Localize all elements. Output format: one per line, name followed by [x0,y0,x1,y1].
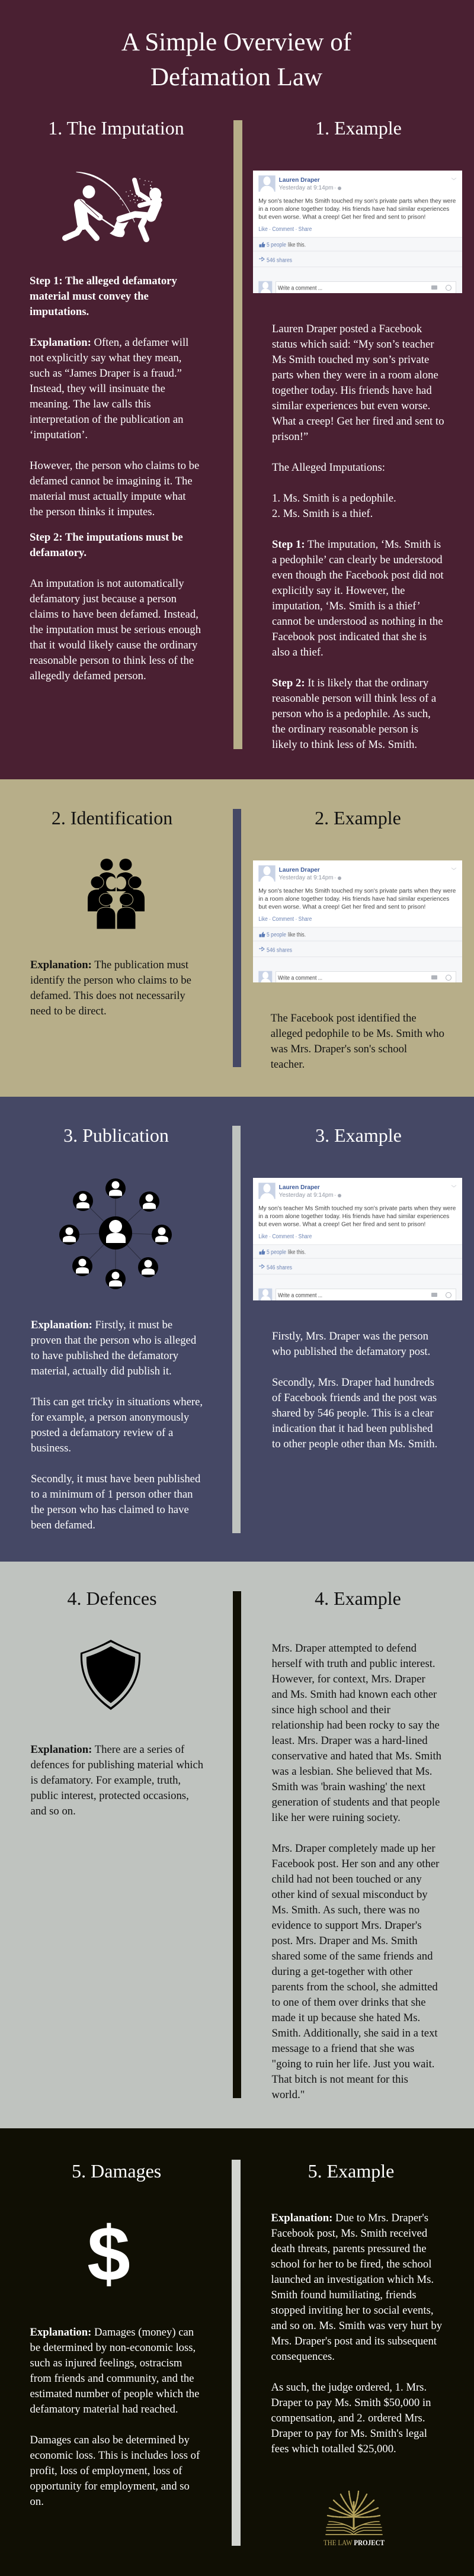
text: defences explanation: and so on. [31,1805,76,1817]
text: example 4: However, for context, Mrs. Draper [271,1673,425,1685]
text: example 1: 1. Ms. Smith is a pedophile. [272,492,396,505]
text: step 1 explanation: Explanation: Often, a defamer will [30,336,188,349]
text: example 1: Facebook post indicated that she is [272,631,427,643]
text: damages explanation: Damages can also be determined by [30,2434,190,2446]
text: example 4: made it up because she hated Ms. [271,2012,420,2024]
text: publication explanation: This can get tricky in situations where, [31,1396,203,1408]
text: example 5: Draper to pay for Ms. Smith's legal [271,2427,427,2440]
text: publication explanation [31,1319,203,1531]
text: step 1 explanation: interpretation of the publication an [30,413,183,426]
facebook post screenshot: in a room alone together today. His friends have had similar experiences [258,1213,449,1220]
facebook post screenshot: My son's teacher Ms Smith touched my son's private parts when they were [258,1205,456,1212]
text: step 1 explanation: However, the person who claims to be [30,460,199,472]
text: example 4: message to a friend that she was [271,2042,414,2055]
facebook post screenshot: · [334,1192,336,1199]
text: example 4: Facebook post. Her son and any other [271,1858,439,1870]
facebook post screenshot: but even worse. What a creep! Get her fired and sent to prison! [258,1221,425,1228]
text: example 4: Ms. Smith. As such, there was no [271,1904,419,1916]
facebook post screenshot: but even worse. What a creep! Get her fired and sent to prison! [258,904,425,910]
text: step 1 explanation: Step 1: The alleged defamatory [30,275,177,287]
text: publication explanation: to a minimum of 1 person other than [31,1488,193,1501]
text: example 4: "going to ruin her life. Just you wait. [271,2058,434,2070]
text: step 2 explanation: claims to have been defamed. Instead, [30,608,198,621]
text: identification explanation: Explanation: The publication must [30,959,188,971]
facebook post screenshot [253,860,462,982]
facebook post screenshot: Write a comment ... [278,1293,322,1299]
text: example 5: Draper to pay Ms. Smith $50,000 in [271,2397,431,2409]
text: example 5: consequences. [271,2350,335,2363]
text: example 4: during a get-together with other [271,1965,412,1978]
facebook post screenshot: Write a comment ... [278,975,322,982]
heading: example 2: 2. Example [315,807,401,828]
logo: the law project [324,2491,385,2547]
text: publication explanation: for example, a person anonymously [31,1411,189,1424]
facebook post screenshot: · [334,185,336,191]
text: example 1: a pedophile’ can clearly be understood [272,554,443,566]
text: example 1: explicitly say it. However, the [272,584,405,597]
text: step 2 explanation [30,531,201,682]
facebook post screenshot: 546 shares [267,1264,292,1271]
facebook post screenshot: Lauren Draper [279,1184,320,1191]
facebook post screenshot: but even worse. What a creep! Get her fired and sent to prison! [258,214,425,220]
text: step 2 explanation: allegedly defamed person. [30,670,146,682]
text: step 2 explanation: reasonable person to think less of the [30,654,194,667]
text: example 4: relationship had been rocky to say the [271,1719,440,1732]
text: example 1: The Alleged Imputations: [272,461,385,474]
facebook post screenshot [253,171,462,293]
panel: 3. publication [0,1097,474,1562]
text: step 1 explanation: ‘imputation’. [30,429,88,441]
text: step 1 explanation: imputations. [30,306,89,318]
text: example 2: was Mrs. Draper's son's school [271,1043,407,1055]
text: step 2 explanation: that it would likely cause the ordinary [30,639,197,651]
text: damages explanation: profit, loss of employment, loss of [30,2465,182,2477]
text: defences explanation [31,1743,203,1817]
text: damages explanation: be determined by non-economic loss, [30,2341,196,2354]
text: example 2: teacher. [271,1058,305,1071]
text: example 1: parts when they were in a room alone [272,369,438,381]
text: example 2 [270,1012,444,1071]
text: step 1 explanation: meaning. The law calls this [30,398,151,410]
text: example 1: together today. His friends have had [272,384,432,397]
text: example 3: Secondly, Mrs. Draper had hundreds [272,1376,434,1389]
text: example 5: compensation, and 2. ordered Mrs. [271,2412,425,2424]
text: example 1: likely to think less of Ms. Smith. [272,738,417,751]
divider bar [232,2160,241,2546]
facebook post screenshot: Yesterday at 9:14pm [279,1192,334,1199]
text: example 5: As such, the judge ordered, 1. Mrs. [271,2381,427,2394]
text: example 3: of Facebook friends and the post was [272,1392,437,1404]
text: publication explanation: Secondly, it must have been published [31,1473,200,1485]
heading: example 1: 1. Example [315,117,402,139]
facebook post screenshot: Yesterday at 9:14pm [279,185,334,191]
facebook post screenshot: · [334,875,336,881]
text: example 4: and Ms. Smith had known each other [271,1688,437,1701]
text: example 4: generation of students and that people [271,1796,440,1809]
facebook post screenshot: 5 people [267,1250,286,1256]
text: damages explanation: opportunity for employment, and so [30,2480,190,2493]
heading: damages: 5. Damages [72,2160,161,2182]
text: example 5: school for her to be fired, the school [271,2258,431,2270]
text: example 4: child had not been touched or any [271,1873,422,1886]
heading: the imputation: 1. The Imputation [48,117,184,139]
text: example 4: evidence to support Mrs. Draper's [271,1919,421,1932]
icon: axe attack [62,172,162,242]
text: example 4: to one of them over drinks that she [271,1996,426,2009]
text: example 4: least. Mrs. Draper was a hard-lined [271,1735,428,1747]
icon: dollar sign: $ [87,2210,130,2297]
title [121,28,352,91]
text: step 1 explanation [30,275,199,518]
text: example 5: death threats, parents pressured the [271,2243,427,2255]
text: example 4: herself with truth and public interest. [271,1658,435,1670]
text: publication explanation: posted a defamatory review of a [31,1427,173,1439]
text: example 4: was a lesbian. She believed that Ms. [271,1765,432,1778]
heading: example 5: 5. Example [308,2160,394,2182]
text: example 4 [271,1642,441,2101]
text: example 1: status which said: “My son’s teacher [272,338,434,351]
text: example 1: Lauren Draper posted a Facebook [272,323,422,335]
text: example 1: 2. Ms. Smith is a thief. [272,508,373,520]
text: example 5: fees which totalled $25,000. [271,2443,396,2455]
heading: publication: 3. Publication [63,1125,169,1146]
text: example 3: who published the defamatory post. [272,1345,430,1358]
text: damages explanation: such as injured feelings, ostracism [30,2357,182,2369]
text: identification explanation: defamed. This does not necessarily [30,990,185,1002]
facebook post screenshot: Lauren Draper [279,867,320,873]
text: example 3: shared by 546 people. This is a clear [272,1407,434,1419]
text: example 1: prison!” [272,431,308,443]
text: example 5: and so on. Ms. Smith was very hurt by [271,2320,442,2332]
facebook post screenshot: Like · Comment · Share [258,226,312,233]
text: example 4: like her were ruining society. [271,1811,401,1824]
text: example 1: cannot be understood as nothing in the [272,615,443,628]
facebook post screenshot: 546 shares [267,947,292,953]
facebook post screenshot: in a room alone together today. His friends have had similar experiences [258,896,449,902]
text: example 1: the ordinary reasonable person is [272,723,418,735]
text: example 1: person who is a pedophile. As such, [272,708,431,720]
divider bar [233,809,241,1067]
text: step 1 explanation: Instead, they will insinuate the [30,383,165,395]
text: example 5: Explanation: Due to Mrs. Draper's [271,2212,428,2224]
text: example 3: indication that it had been published [272,1422,433,1435]
panel: 5. damages [0,2128,474,2576]
text: step 1 explanation: not explicitly say what they mean, [30,352,181,364]
text: publication explanation: business. [31,1442,71,1454]
panel: 2. identification [0,779,474,1097]
text: step 2 explanation: the imputation must be serious enough [30,624,201,636]
text: publication explanation: the person who has claimed to have [31,1504,189,1516]
text: step 1 explanation: the person thinks it imputes. [30,506,155,518]
facebook post screenshot: My son's teacher Ms Smith touched my son's private parts when they were [258,888,456,894]
text: example 4: other kind of sexual misconduct by [271,1888,428,1901]
text: example 1: What a creep! Get her fired and sent to [272,415,444,428]
logo: the law project: THE LAW PROJECT [324,2538,385,2547]
text: example 4: That bitch is not meant for this [271,2073,408,2086]
text: damages explanation: economic loss. This is includes loss of [30,2449,200,2462]
text: example 4: conservative and hated that Ms. Smith [271,1750,441,1762]
text: publication explanation: proven that the person who is alleged [31,1334,196,1347]
text: damages explanation: on. [30,2495,44,2508]
title: Defamation Law [150,63,322,91]
text: identification explanation [30,959,191,1017]
text: step 2 explanation: defamatory just because a person [30,593,177,605]
text: example 4: shared some of the same friends and [271,1950,433,1962]
text: example 4: Mrs. Draper attempted to defend [271,1642,417,1655]
text: example 5 [271,2212,442,2455]
text: example 4: parents from the school, she admitted [271,1981,438,1993]
text: example 4: post. Mrs. Draper and Ms. Smith [271,1935,418,1947]
text: damages explanation: Explanation: Damages (money) can [30,2326,194,2339]
text: step 2 explanation: Step 2: The imputations must be [30,531,183,544]
text: example 4: since high school and their [271,1704,390,1716]
text: example 5: Facebook post, Ms. Smith received [271,2227,427,2240]
panel: 1. the imputation [0,0,474,779]
text: example 1 [272,323,444,751]
text: defences explanation: is defamatory. For example, truth, [31,1774,181,1787]
facebook post screenshot: 546 shares [267,257,292,264]
text: example 3 [272,1330,437,1450]
text: step 1 explanation: material must convey the [30,290,149,303]
facebook post screenshot: in a room alone together today. His friends have had similar experiences [258,206,449,213]
text: damages explanation: defamatory material had reached. [30,2403,178,2416]
heading: identification: 2. Identification [52,807,172,828]
text: example 1: even though the Facebook post did not [272,569,444,582]
heading: defences: 4. Defences [67,1588,157,1609]
text: example 3: Firstly, Mrs. Draper was the person [272,1330,428,1342]
text: example 4: Mrs. Draper completely made up her [271,1842,435,1855]
text: publication explanation: material, actually did publish it. [31,1365,172,1377]
text: identification explanation: need to be direct. [30,1005,107,1017]
icon: shield [81,1640,141,1710]
facebook post screenshot: Write a comment ... [278,285,322,292]
text: damages explanation [30,2326,200,2508]
icon: network of people [59,1178,172,1289]
facebook post screenshot: Yesterday at 9:14pm [279,875,334,881]
text: example 1: similar experiences but even worse. [272,400,430,412]
facebook post screenshot: My son's teacher Ms Smith touched my son's private parts when they were [258,198,456,204]
facebook post screenshot: like this. [288,1250,306,1256]
text: defences explanation: defences for publishing material which [31,1759,203,1771]
text: example 1: Step 1: The imputation, ‘Ms. Smith is [272,538,441,551]
facebook post screenshot: Like · Comment · Share [258,916,312,923]
text: step 2 explanation: An imputation is not automatically [30,577,184,590]
facebook post screenshot: like this. [288,932,306,939]
text: damages explanation: from friends and community, and the [30,2372,194,2385]
text: defences explanation: public interest, protected occasions, [31,1790,189,1802]
text: example 1: Ms Smith touched my son’s private [272,354,429,366]
text: publication explanation: to have published the defamatory [31,1350,178,1362]
text: damages explanation: estimated number of people which the [30,2388,199,2400]
text: example 5: Mrs. Draper's post and its subsequent [271,2335,437,2347]
text: example 5: Smith found humiliating, friends [271,2289,416,2301]
text: step 2 explanation: defamatory. [30,547,87,559]
icon: group of people [88,859,145,929]
text: example 2: alleged pedophile to be Ms. Smith who [271,1027,444,1040]
text: example 1: Step 2: It is likely that the ordinary [272,677,428,689]
facebook post screenshot: 5 people [267,932,286,939]
heading: example 4: 4. Example [315,1588,401,1609]
text: example 5: stopped inviting her to social events, [271,2304,434,2317]
text: example 2: The Facebook post identified the [271,1012,417,1024]
text: example 1: reasonable person will think less of a [272,692,436,705]
text: step 1 explanation: such as “James Draper is a fraud.” [30,367,182,380]
text: example 4: Smith. Additionally, she said in a text [271,2027,438,2039]
text: step 1 explanation: material must actually impute what [30,490,186,503]
panel: 4. defences [0,1562,474,2128]
text: example 4: Smith was 'brain washing' the next [271,1781,425,1793]
text: defences explanation: Explanation: There are a series of [31,1743,184,1756]
text: example 5: launched an investigation which Ms. [271,2273,434,2286]
facebook post screenshot: like this. [288,242,306,249]
text: publication explanation: Explanation: Firstly, it must be [31,1319,172,1331]
divider bar [232,1126,241,1533]
facebook post screenshot: Lauren Draper [279,177,320,184]
text: example 4: world." [271,2089,305,2101]
facebook post screenshot [253,1178,462,1300]
text: example 3: to other people other than Ms. Smith. [272,1438,437,1450]
text: example 1: also a thief. [272,646,324,659]
divider bar [233,120,242,749]
text: step 1 explanation: defamed cannot be imagining it. The [30,475,193,487]
facebook post screenshot: Like · Comment · Share [258,1234,312,1240]
text: identification explanation: identify the person who claims to be [30,974,191,987]
heading: example 3: 3. Example [315,1125,402,1146]
facebook post screenshot: 5 people [267,242,286,249]
divider bar [233,1591,241,2098]
text: example 1: imputation, ‘Ms. Smith is a thief’ [272,600,421,612]
text: publication explanation: been defamed. [31,1519,95,1531]
title: A Simple Overview of [121,28,351,56]
